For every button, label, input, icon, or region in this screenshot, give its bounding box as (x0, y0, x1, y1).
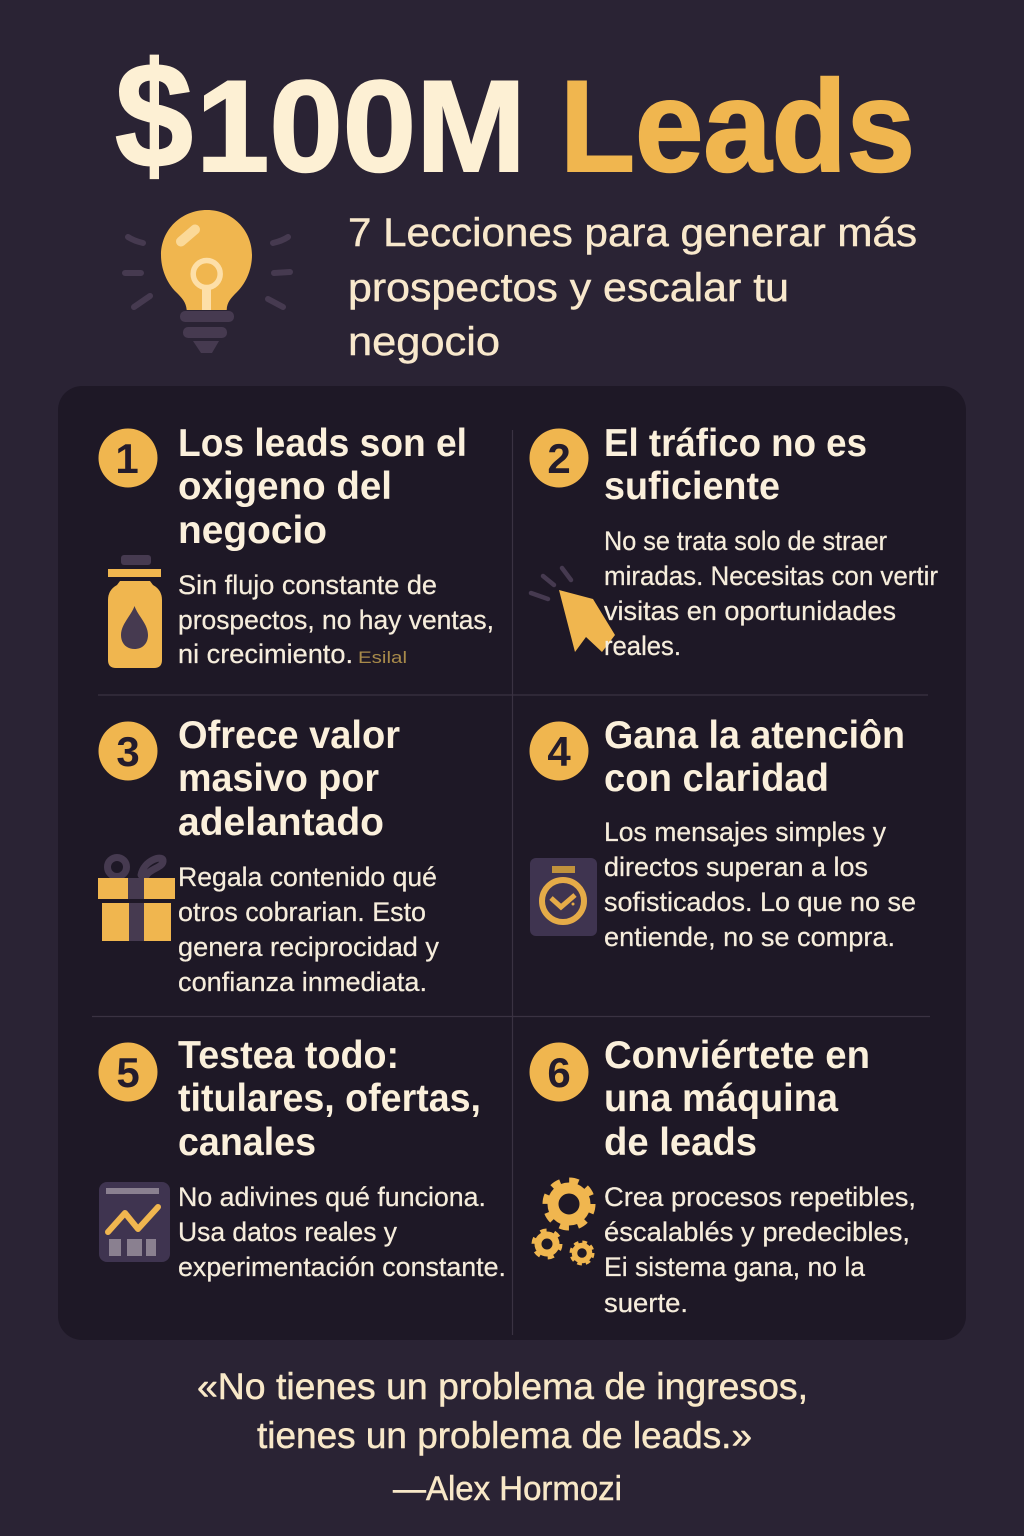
body 2: miradas. Necesitas con vertir (604, 561, 938, 591)
title: $ (115, 31, 193, 199)
quote (197, 1366, 808, 1508)
lesson 4 (530, 714, 916, 952)
icon: chart (99, 1182, 170, 1262)
heading 4: con claridad (604, 757, 829, 800)
body 2: reales. (604, 631, 681, 661)
heading 5: titulares, ofertas, (178, 1077, 481, 1120)
number badge 1: 1 (115, 435, 139, 482)
body 1: Esilal (358, 648, 407, 667)
icon: oil bottle (108, 555, 162, 668)
quote: —Alex Hormozi (393, 1470, 622, 1508)
title: Leads (560, 53, 915, 199)
heading 5 (178, 1034, 481, 1164)
number badge 1 (98, 428, 158, 488)
subtitle (348, 211, 917, 364)
heading 3: adelantado (178, 801, 384, 844)
heading 5: Testea todo: (178, 1034, 399, 1077)
lesson 5 (98, 1034, 506, 1282)
body 6 (604, 1182, 916, 1318)
body 2: No se trata solo de straer (604, 526, 887, 556)
body 3: genera reciprocidad y (178, 932, 439, 962)
title (115, 31, 915, 199)
body 1: prospectos, no hay ventas, (178, 605, 494, 635)
icon: gift (98, 858, 175, 941)
body 6: Ei sistema gana, no la (604, 1252, 866, 1282)
body 5: experimentación constante. (178, 1252, 506, 1282)
number badge 4: 4 (547, 728, 571, 775)
body 3 (178, 862, 439, 997)
body 4: entiende, no se compra. (604, 922, 895, 952)
subtitle: negocio (348, 320, 500, 364)
body 5 (178, 1182, 506, 1282)
body 5: No adivines qué funciona. (178, 1182, 486, 1212)
quote: «No tienes un problema de ingresos, (197, 1366, 808, 1407)
body 2: visitas en oportunidades (604, 596, 896, 626)
subtitle: 7 Lecciones para generar más (348, 211, 917, 255)
body 1 (178, 570, 494, 669)
heading 1 (178, 422, 467, 552)
body 6: suerte. (604, 1288, 688, 1318)
body 4: Los mensajes simples y (604, 817, 886, 847)
heading 4: Gana la atenciôn (604, 714, 905, 757)
heading 6 (604, 1034, 870, 1164)
heading 6: de leads (604, 1121, 757, 1164)
number badge 2: 2 (547, 435, 571, 482)
subtitle: prospectos y escalar tu (348, 266, 789, 310)
number badge 6 (530, 1042, 588, 1102)
body 3: confianza inmediata. (178, 967, 427, 997)
lesson 3 (98, 714, 439, 997)
number badge 5: 5 (116, 1049, 140, 1096)
heading 5: canales (178, 1121, 316, 1164)
heading 2: El tráfico no es (604, 422, 867, 465)
heading 2: suficiente (604, 465, 780, 508)
body 6: Crea procesos repetibles, (604, 1182, 916, 1212)
heading 3 (178, 714, 400, 844)
body 2 (604, 526, 938, 661)
icon: stopwatch (530, 858, 597, 936)
heading 2 (604, 422, 867, 508)
lesson 6 (530, 1034, 916, 1318)
icon: light bulb (125, 210, 290, 353)
heading 1: negocio (178, 509, 327, 552)
number badge 6: 6 (547, 1049, 571, 1096)
body 4: sofisticados. Lo que no se (604, 887, 916, 917)
number badge 5 (98, 1042, 158, 1102)
lesson 2 (530, 422, 938, 661)
quote: tienes un problema de leads.» (257, 1415, 752, 1456)
body 1: Sin flujo constante de (178, 570, 437, 600)
heading 1: Los leads son el (178, 422, 467, 465)
heading 1: oxigeno del (178, 465, 392, 508)
body 1: ni crecimiento. (178, 639, 353, 669)
number badge 2 (530, 428, 588, 488)
number badge 3 (98, 722, 158, 780)
icon: cursor (531, 568, 615, 652)
number badge 3: 3 (116, 728, 140, 775)
body 3: otros cobrarian. Esto (178, 897, 426, 927)
body 6: éscalablés y predecibles, (604, 1217, 910, 1247)
body 4 (604, 817, 916, 952)
heading 3: Ofrece valor (178, 714, 400, 757)
title: 100M (196, 53, 526, 199)
body 4: directos superan a los (604, 852, 868, 882)
icon: gears (534, 1182, 592, 1264)
panel: lessons (58, 386, 966, 1340)
number badge 4 (530, 722, 588, 780)
heading 6: una máquina (604, 1077, 838, 1120)
body 3: Regala contenido qué (178, 862, 437, 892)
heading 3: masivo por (178, 757, 379, 800)
heading 6: Conviértete en (604, 1034, 870, 1077)
heading 4 (604, 714, 905, 800)
body 5: Usa datos reales y (178, 1217, 397, 1247)
lesson 1 (98, 422, 494, 669)
